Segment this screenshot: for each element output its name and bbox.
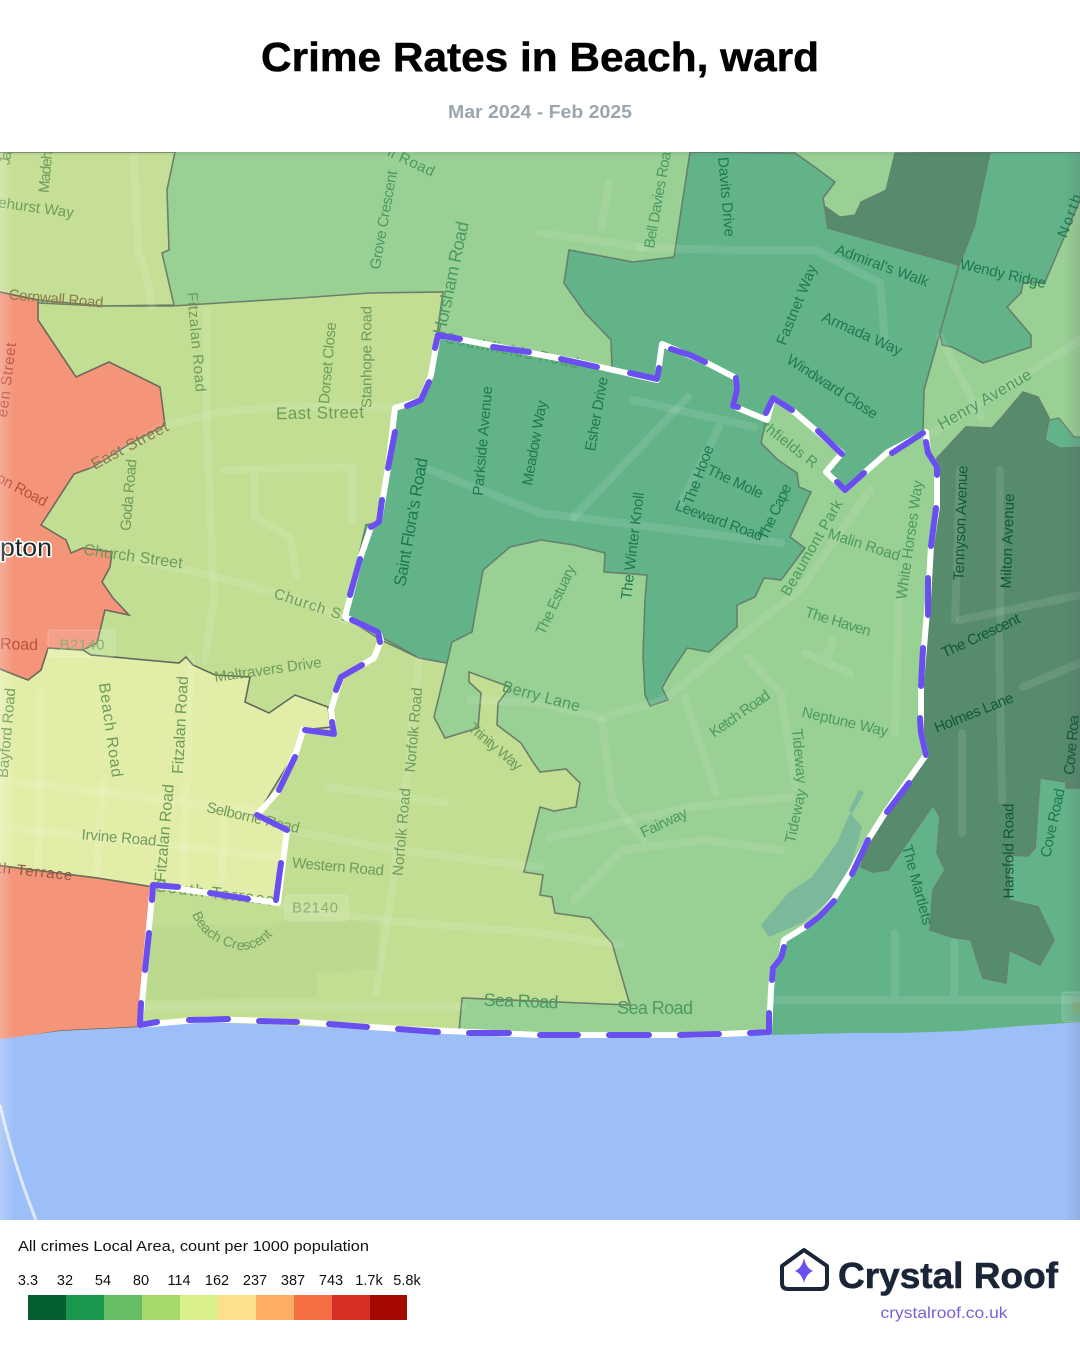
logo <box>782 1250 1059 1322</box>
street labels: orange area: East Street <box>88 418 172 473</box>
street labels: dark green area: Milton Avenue <box>998 493 1018 589</box>
street labels: west side: Fitzalan Road <box>183 291 209 393</box>
street labels: medium green area: Henry Avenue <box>935 366 1035 434</box>
street labels: strong green area: Windward Close <box>783 351 881 423</box>
street labels: medium green area: White Horses Way <box>893 479 927 601</box>
street labels: dark green area: Harsfold Road <box>1000 804 1018 898</box>
legend scale values: 162 <box>205 1273 229 1289</box>
street labels: medium green area: Grove Crescent <box>367 168 401 271</box>
map base: medium green area <box>38 152 1080 1038</box>
place label: town name: pton <box>0 534 52 562</box>
street labels: medium green area: The Estuary <box>532 562 580 638</box>
street labels: strong green area: The Mole <box>704 462 766 502</box>
area: strong green south-east <box>770 779 1080 1035</box>
street labels: medium green area: Berry Lane <box>500 678 582 716</box>
street labels: west side: Irvine Road <box>81 826 157 850</box>
area: north orange high crime <box>0 291 165 680</box>
street labels: strong green area: The Martlets <box>898 843 936 927</box>
road number shields <box>48 630 1080 1022</box>
website: crystalroof.co.uk <box>880 1305 1009 1322</box>
area: dark green east <box>861 392 1080 983</box>
area: dark green north <box>826 152 990 265</box>
street labels: medium green area: ll Road <box>385 144 437 180</box>
legend scale values: 80 <box>133 1273 149 1289</box>
legend scale values: 1.7k <box>355 1273 383 1289</box>
street labels: orange area: Road <box>0 636 38 654</box>
street labels: west side <box>0 152 522 950</box>
street labels: medium green area: Tideway <box>782 787 810 845</box>
map edge vignette <box>0 152 1080 1220</box>
street labels: strong green area <box>390 156 1080 927</box>
street labels: medium green area: Tideway <box>788 728 810 785</box>
street labels: strong green area: Leeward Road <box>673 497 765 545</box>
legend scale values <box>18 1273 421 1289</box>
subtitle: date range: Mar 2024 - Feb 2025 <box>448 102 632 122</box>
street labels: west side: Norfolk Road <box>390 787 414 877</box>
legend scale values: 743 <box>319 1273 343 1289</box>
ward boundary: purple dashes <box>140 335 937 1035</box>
street labels: strong green area: Armada Way <box>819 309 905 359</box>
road network <box>0 157 1080 1007</box>
street labels: medium green area: The Haven <box>803 604 873 640</box>
street labels: west side: Selborne Road <box>205 799 301 837</box>
street labels: west side: Norfolk Road <box>402 687 426 773</box>
street labels: strong green area: Fastnet Way <box>773 262 821 348</box>
street labels: strong green area: Meadow Way <box>519 399 551 487</box>
street labels: west side: Church Street <box>82 542 184 572</box>
icon: house with star <box>782 1250 827 1289</box>
street labels: west side: Dorset Close <box>316 321 340 405</box>
street labels: strong green area: Esher Drive <box>582 376 612 452</box>
street labels: dark green area: Holmes Lane <box>932 689 1016 737</box>
street labels: west side: Church St <box>272 585 349 625</box>
street labels: medium green area: thfields R <box>759 418 821 472</box>
area: pale yellow high crime band <box>0 648 331 903</box>
street labels: medium green area: Malin Road <box>826 525 902 565</box>
street labels: orange area <box>0 286 172 884</box>
legend scale values: 32 <box>57 1273 73 1289</box>
street labels: medium green area <box>367 144 1035 1018</box>
street labels: dark green area: The Crescent <box>939 610 1024 662</box>
title: Crime Rates in Beach, ward <box>261 34 819 80</box>
area: north-west light green <box>0 152 175 306</box>
street labels: strong green area: Saint Flora's Road <box>390 456 432 588</box>
sea <box>0 1022 1080 1225</box>
street labels: strong green area: Wendy Ridge <box>958 256 1048 292</box>
legend title: All crimes Local Area, count per 1000 population <box>18 1239 369 1255</box>
street labels: strong green area: Cove Road <box>1037 787 1069 859</box>
street labels: west side: Goda Road <box>117 458 141 532</box>
street labels: medium green area: Bell Davies Roa <box>641 150 675 250</box>
street labels: medium green area: Beaumont Park <box>778 497 847 599</box>
area: green field by Beach Crescent <box>147 920 379 1000</box>
street labels: west side: Fitzalan Road <box>152 783 178 883</box>
area: central light green <box>0 292 630 1032</box>
legend scale values: 5.8k <box>393 1273 421 1289</box>
street labels: west side: Maltravers Drive <box>213 654 323 686</box>
street labels: dark green area: Tennyson Avenue <box>950 465 972 581</box>
street labels: west side: Fitzalan Road <box>170 676 192 774</box>
street labels: strong green area: The Cape <box>755 481 795 543</box>
street labels: medium green area: Horsham Road <box>429 220 473 336</box>
brand name: Crystal Roof <box>838 1255 1059 1296</box>
legend <box>18 1239 421 1320</box>
legend colour scale <box>28 1295 407 1320</box>
street labels: medium green area: Sea Road <box>483 990 559 1012</box>
legend scale values: 114 <box>167 1273 191 1289</box>
street labels: orange area: Cornwall Road <box>8 286 104 312</box>
road shield labels <box>60 636 1080 1016</box>
street labels: west side: Trinity Way <box>465 720 526 775</box>
area: small strong green east <box>1045 418 1080 448</box>
legend scale values: 3.3 <box>18 1273 38 1289</box>
street labels: dark green area <box>932 465 1080 898</box>
street labels: west side: South Terrace <box>154 876 276 910</box>
street labels: medium green area: Fairway <box>638 805 691 841</box>
area: strong green north-east <box>940 152 1080 363</box>
street labels: strong green area: Admiral's Walk <box>833 241 931 291</box>
street labels: strong green area: Davits Drive <box>714 156 738 238</box>
street labels: medium green area: Sea Road <box>617 998 693 1018</box>
street labels: medium green area: Southfields Road <box>444 330 580 372</box>
pond <box>761 790 864 937</box>
area: south orange high crime <box>0 865 153 1042</box>
legend scale values: 54 <box>95 1273 111 1289</box>
road shield labels: B2140 <box>292 900 338 916</box>
street labels: west side: Madeh <box>36 150 56 194</box>
street labels: west side: Western Road <box>291 855 385 879</box>
street labels: west side: Beach Road <box>95 682 125 778</box>
street labels: strong green area: Parkside Avenue <box>470 385 496 497</box>
street labels: medium green area: Neptune Way <box>800 704 890 740</box>
street labels: west side: East Street <box>276 403 364 423</box>
ward boundary: white outline <box>140 335 937 1035</box>
street labels: west side: Beach Crescent <box>192 911 272 950</box>
street labels: west side: Stanhope Road <box>358 306 376 408</box>
street labels: medium green area: Ketch Road <box>706 687 774 741</box>
street labels: strong green area: The Winter Knoll <box>618 491 648 601</box>
legend scale values: 237 <box>243 1273 267 1289</box>
street labels: strong green area: The Hooe <box>680 443 718 507</box>
area: strong green north and ward centre <box>345 152 959 706</box>
road shield labels: B2140 <box>60 636 104 654</box>
legend scale values: 387 <box>281 1273 305 1289</box>
